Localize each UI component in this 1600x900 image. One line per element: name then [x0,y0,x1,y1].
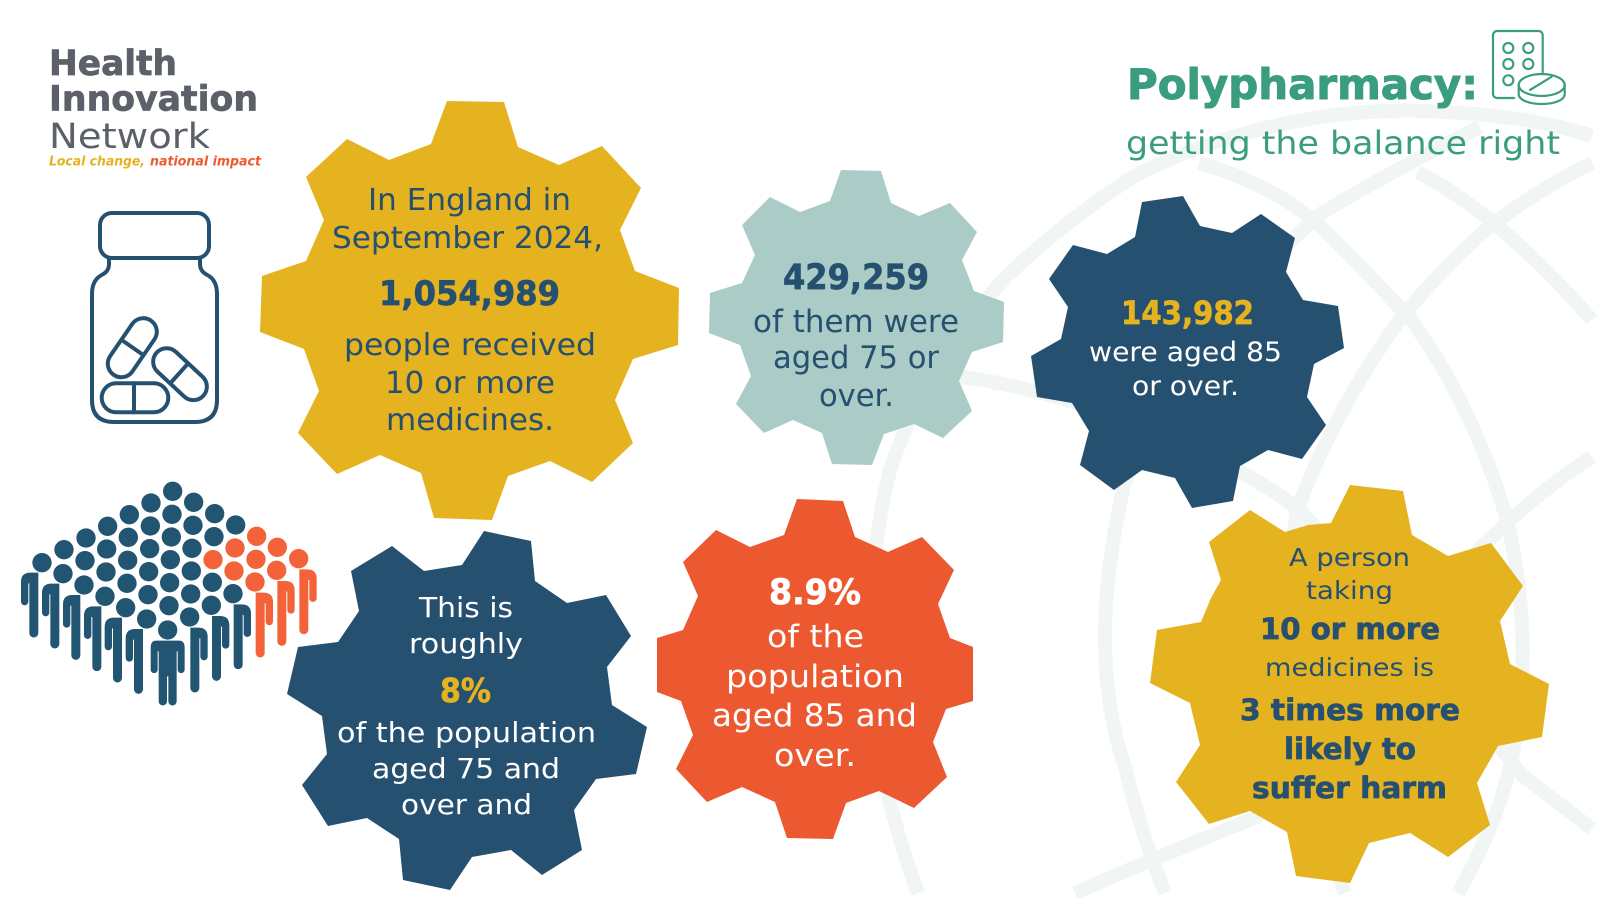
panel: yellow gear, 1,054,989 people: medicines. [386,403,554,438]
panel: orange gear, 8.9% of population aged 85 and over [657,499,973,839]
panel: navy gear, roughly 8% of population aged 75 and over: This is [418,591,513,624]
panel: yellow gear, 1,054,989 people: people received [344,328,596,363]
panel: teal gear, 429,259 aged 75 or over: of them were [753,304,959,340]
panel: navy gear, 143,982 aged 85 or over: were aged 85 [1089,337,1282,368]
panel: orange gear, 8.9% of population aged 85 and over: 8.9% [769,573,861,613]
title: Polypharmacy: Polypharmacy: [1127,60,1478,109]
panel: navy gear, roughly 8% of population aged 75 and over: aged 75 and [372,752,560,785]
panel: navy gear, roughly 8% of population aged 75 and over: roughly [409,627,523,660]
panel: yellow gear, 3 times more likely to suffer harm: suffer harm [1252,771,1447,805]
icon: crowd of people with orange highlighted group [21,482,317,705]
icon: pill bottle [92,213,217,422]
panel: yellow gear, 1,054,989 people: In England in [368,183,571,218]
title: Polypharmacy [1126,60,1560,162]
panel: yellow gear, 3 times more likely to suffer harm: taking [1306,576,1393,605]
panel: yellow gear, 3 times more likely to suffer harm: 10 or more [1260,612,1440,646]
logo: Health Innovation Network: Innovation [49,80,258,120]
logo: Health Innovation Network [49,44,262,170]
panel: yellow gear, 3 times more likely to suffer harm: medicines is [1265,653,1434,682]
panel: yellow gear, 3 times more likely to suffer harm: A person [1289,543,1410,572]
icon: blister pack and tablet [1493,31,1565,104]
panel: yellow gear, 1,054,989 people: 1,054,989 [379,274,560,314]
panel: navy gear, roughly 8% of population aged 75 and over: over and [401,788,532,821]
logo: Health Innovation Network: Network [49,117,211,157]
panel: yellow gear, 1,054,989 people [260,101,679,520]
panel: orange gear, 8.9% of population aged 85 and over: aged 85 and [712,698,917,734]
panel: yellow gear, 1,054,989 people: 10 or more [385,366,555,401]
logo: Health Innovation Network: national impact [150,154,262,170]
background globe watermark [870,111,1592,893]
panel: orange gear, 8.9% of population aged 85 and over: of the [767,619,864,655]
panel: navy gear, roughly 8% of population aged 75 and over [287,531,647,890]
panel: teal gear, 429,259 aged 75 or over: 429,259 [783,258,929,298]
panel: yellow gear, 3 times more likely to suffer harm: likely to [1284,732,1416,766]
panel: teal gear, 429,259 aged 75 or over: aged 75 or [773,340,939,376]
panel: orange gear, 8.9% of population aged 85 and over: over. [774,738,856,774]
logo: Health Innovation Network: Health [49,44,177,84]
panel: navy gear, roughly 8% of population aged 75 and over: of the population [337,716,596,749]
panel: yellow gear, 3 times more likely to suffer harm: 3 times more [1240,693,1460,727]
panel: teal gear, 429,259 aged 75 or over: over. [819,378,894,414]
panel: navy gear, 143,982 aged 85 or over [1031,196,1344,508]
logo: Health Innovation Network: Local change, [49,154,145,170]
title: Polypharmacy: getting the balance right [1126,124,1560,162]
panel: yellow gear, 1,054,989 people: September 2024, [332,221,603,256]
panel: yellow gear, 3 times more likely to suffer harm [1150,485,1549,883]
panel: navy gear, roughly 8% of population aged 75 and over: 8% [440,671,491,710]
panel: navy gear, 143,982 aged 85 or over: or over. [1132,371,1239,402]
panel: navy gear, 143,982 aged 85 or over: 143,982 [1121,294,1254,332]
panel: orange gear, 8.9% of population aged 85 and over: population [726,659,904,695]
panel: teal gear, 429,259 aged 75 or over [709,170,1004,465]
